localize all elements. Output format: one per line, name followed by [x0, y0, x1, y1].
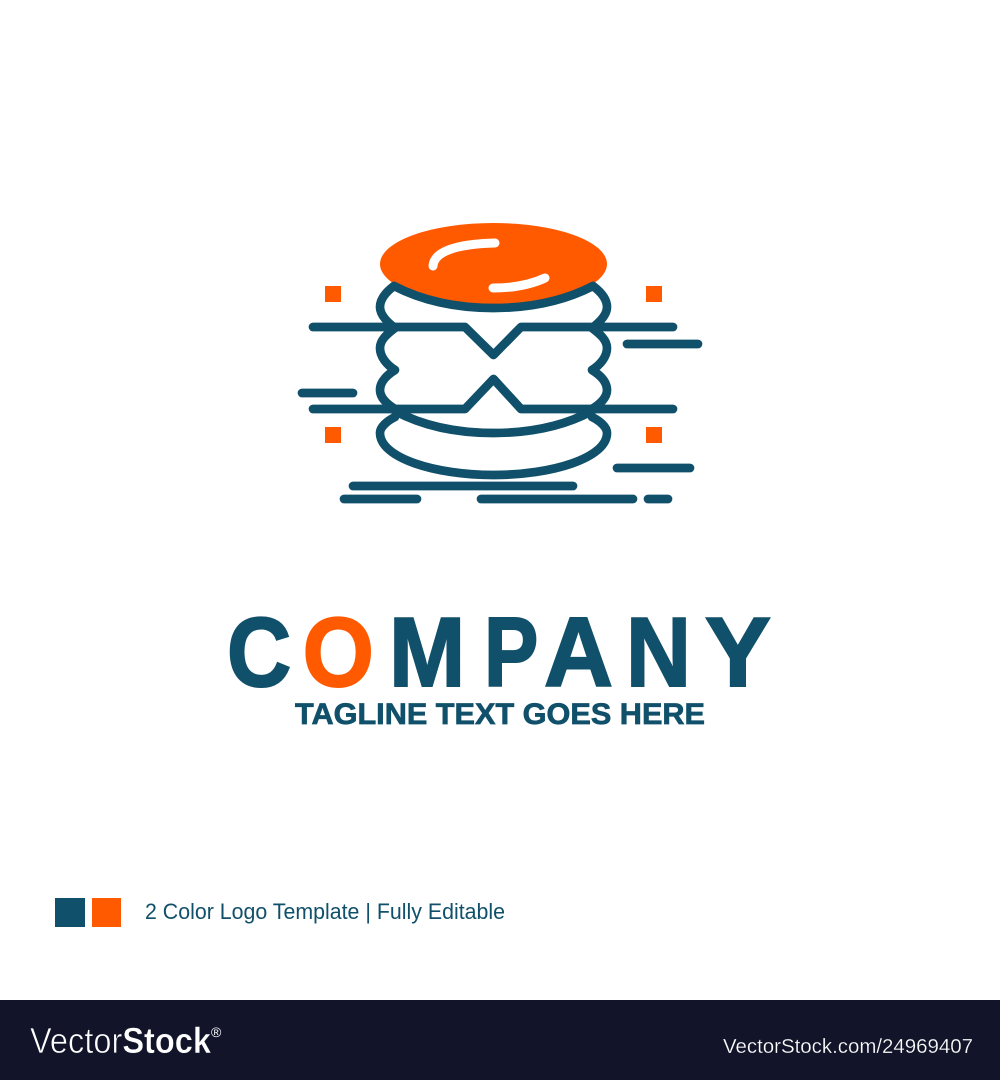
- orange accent squares: [325, 286, 662, 443]
- colour swatches: [55, 898, 121, 927]
- company name: P: [484, 597, 538, 707]
- company name: C: [227, 597, 291, 707]
- company name: A: [544, 597, 613, 707]
- tagline: TAGLINE TEXT GOES HERE: [295, 698, 705, 731]
- company name: N: [626, 597, 691, 707]
- orange top disc: [380, 223, 607, 305]
- footer image id: VectorStock.com/24969407: [723, 1036, 973, 1058]
- teal stacked layers outline: [313, 286, 673, 475]
- company name: M: [389, 597, 465, 707]
- footer brand logo: VectorStock: [30, 1020, 212, 1061]
- company name: [227, 597, 771, 707]
- footer bar: [0, 1000, 1000, 1080]
- company name: Y: [705, 597, 771, 707]
- icon: stacked burger/database logo: [302, 223, 698, 499]
- template caption: 2 Color Logo Template | Fully Editable: [145, 899, 505, 924]
- registered mark: ®: [211, 1024, 222, 1040]
- company name: O: [303, 597, 374, 707]
- motion lines: [302, 344, 698, 499]
